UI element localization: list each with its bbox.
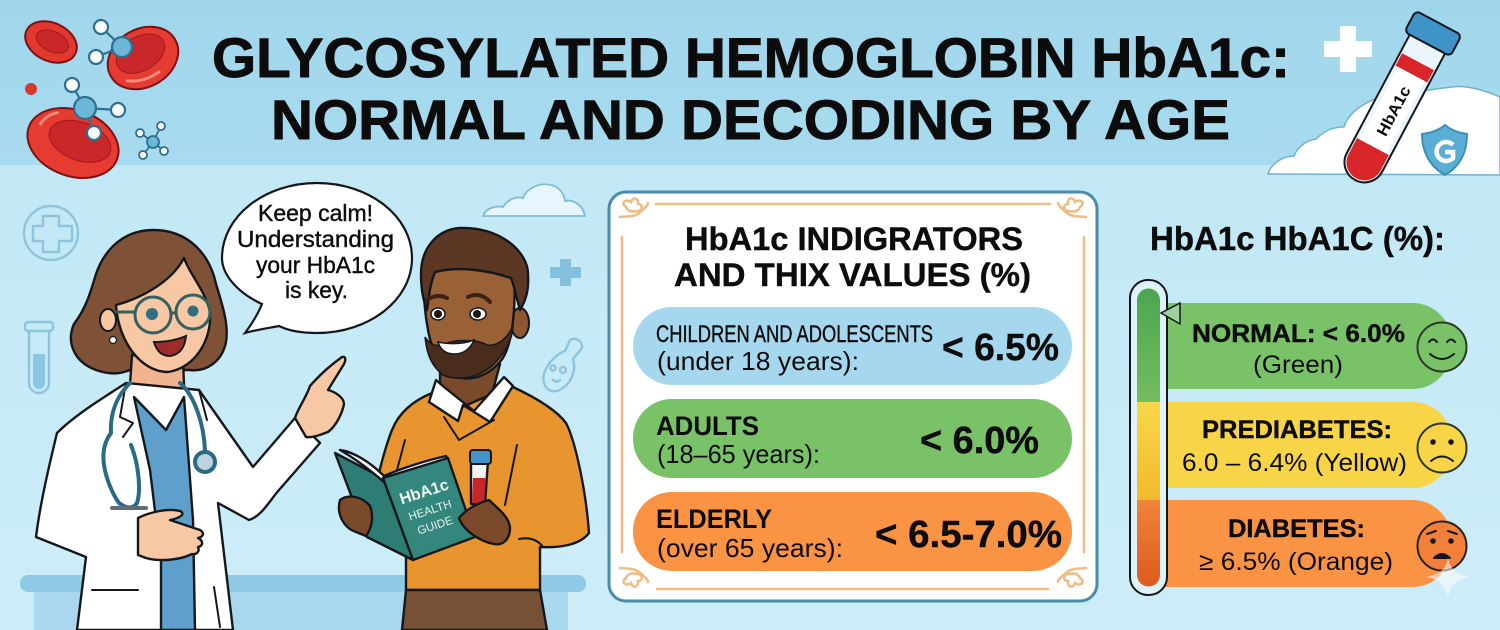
book: HbA1c Health Guide: HEALTH	[407, 498, 453, 524]
speech bubble: is key.	[285, 277, 348, 303]
right heading: HbA1c HbA1C (%):	[1150, 220, 1445, 257]
bar: normal	[1160, 303, 1453, 389]
panel heading	[674, 221, 1031, 293]
doctor stethoscope	[103, 383, 215, 508]
doctor hair	[71, 230, 227, 373]
icon: sparkle watermark	[1426, 558, 1470, 597]
speech bubble: Keep calm!	[258, 200, 373, 226]
icon: faint dropper	[544, 339, 582, 391]
man	[335, 228, 589, 630]
doctor neck	[130, 355, 184, 421]
bar: diabetes: DIABETES:	[1228, 515, 1365, 543]
icon: happy face	[1418, 322, 1466, 372]
icon: worried face	[1418, 424, 1466, 472]
speech bubble	[222, 183, 412, 333]
doctor lower hand	[138, 510, 203, 560]
man ear	[511, 308, 529, 338]
row: elderly: < 6.5-7.0%	[875, 514, 1062, 556]
row: children and adolescents: (under 18 years):	[657, 346, 859, 376]
doctor face	[116, 258, 210, 372]
row: elderly: (over 65 years):	[657, 533, 843, 563]
row: children and adolescents: CHILDREN AND ADOLESCENTS	[656, 321, 933, 348]
man sweater	[367, 387, 589, 590]
title: GLYCOSYLATED HEMOGLOBIN HbA1c:	[212, 26, 1290, 89]
status bars	[1160, 303, 1453, 587]
book: HbA1c Health Guide	[335, 450, 475, 560]
doctor coat	[36, 383, 320, 630]
thermometer gauge	[1130, 280, 1180, 595]
bar: diabetes: ≥ 6.5% (Orange)	[1199, 548, 1393, 576]
row: adults: < 6.0%	[920, 420, 1039, 462]
panel heading: HbA1c INDIGRATORS	[685, 221, 1023, 257]
background: lower area	[0, 165, 1500, 630]
icon: cloud top right	[1268, 86, 1500, 175]
doctor ear	[100, 309, 116, 344]
doctor glasses and eyes	[115, 295, 210, 333]
small blood tube	[470, 450, 491, 504]
book: HbA1c Health Guide: GUIDE	[416, 515, 455, 538]
man beard	[425, 325, 513, 378]
icon: sad face	[1418, 522, 1466, 570]
doctor scrubs	[134, 397, 195, 630]
doctor pointing hand	[295, 357, 345, 437]
bar: diabetes	[1160, 500, 1453, 587]
bar: prediabetes: 6.0 – 6.4% (Yellow)	[1182, 449, 1407, 477]
man hair	[421, 228, 528, 310]
icon: small plus	[550, 259, 581, 286]
row: elderly: ELDERLY	[656, 504, 772, 534]
background: floor counter	[20, 575, 586, 630]
icon: small cloud	[483, 184, 585, 216]
bar: normal: (Green)	[1253, 351, 1343, 379]
title	[212, 26, 1290, 151]
icon: faint medical cross circle	[24, 206, 78, 260]
man neck	[440, 364, 500, 408]
man right hand	[459, 500, 510, 544]
man smile	[438, 340, 474, 354]
doctor mouth	[154, 336, 186, 356]
bar: prediabetes: PREDIABETES:	[1202, 416, 1392, 444]
row: children and adolescents: < 6.5%	[942, 327, 1059, 369]
man face	[424, 262, 515, 378]
row: adults: ADULTS	[656, 411, 759, 441]
book: HbA1c Health Guide: HbA1c	[398, 476, 451, 508]
man trousers	[402, 590, 547, 630]
doctor coat lapels and pockets	[92, 383, 220, 627]
panel: age indicators	[609, 192, 1097, 601]
speech bubble: Understanding	[237, 226, 394, 252]
background: title band	[0, 0, 1500, 165]
doctor	[36, 230, 345, 630]
speech bubble: your HbA1c	[256, 252, 375, 278]
bar: prediabetes	[1160, 402, 1453, 488]
man eyes and brows	[427, 295, 490, 320]
row: children and adolescents	[633, 307, 1072, 385]
man sweater folds	[397, 417, 543, 547]
icon: red blood cells and molecules	[18, 13, 190, 190]
row: elderly	[633, 492, 1072, 571]
icon: shield	[1422, 125, 1467, 175]
decorative orange frame	[620, 198, 1086, 589]
man left hand	[339, 497, 372, 536]
title: NORMAL AND DECODING BY AGE	[271, 88, 1230, 151]
icon: HbA1c test tube	[1332, 11, 1462, 192]
man collar	[429, 377, 513, 422]
panel heading: AND THIX VALUES (%)	[674, 257, 1031, 293]
icon: faint test tube	[25, 322, 53, 393]
row: adults	[633, 399, 1072, 478]
row: adults: (18–65 years):	[657, 439, 820, 469]
bar: normal: NORMAL: < 6.0%	[1192, 320, 1405, 348]
icon: HbA1c test tube: HbA1c	[1374, 84, 1415, 139]
icon: white cross	[1324, 26, 1372, 72]
